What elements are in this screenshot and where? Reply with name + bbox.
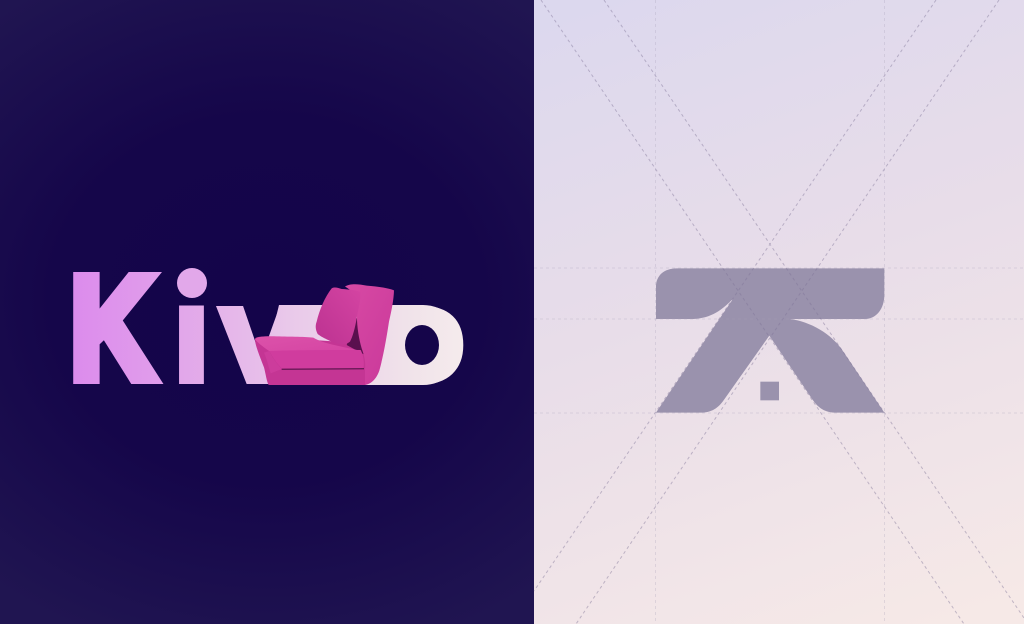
brand symbol bbox=[656, 268, 884, 413]
back cushion bbox=[316, 288, 360, 344]
symbol dot bbox=[760, 382, 779, 400]
sofa seam bbox=[282, 367, 364, 371]
sofa back bbox=[345, 284, 394, 385]
construction grid lines bbox=[534, 0, 1024, 624]
letter i: i bbox=[177, 265, 206, 405]
letter K: K bbox=[70, 247, 155, 410]
counter of o bbox=[405, 325, 439, 365]
icon: pink sofa bbox=[255, 284, 394, 385]
letter v: v bbox=[218, 256, 304, 412]
sofa base bbox=[255, 337, 379, 385]
seat front face bbox=[269, 350, 364, 368]
left fold bbox=[264, 351, 282, 373]
panel: dark wordmark background bbox=[0, 0, 534, 624]
letter o: o bbox=[375, 253, 469, 414]
wordmark: Kivo bbox=[73, 268, 464, 385]
seat top surface bbox=[255, 336, 360, 354]
letter o bbox=[270, 253, 469, 414]
symbol body bbox=[656, 268, 884, 413]
connecting bar and bowl of o bbox=[270, 305, 463, 385]
shadow behind cushion bbox=[347, 317, 365, 355]
panel: light construction background bbox=[534, 0, 1024, 624]
